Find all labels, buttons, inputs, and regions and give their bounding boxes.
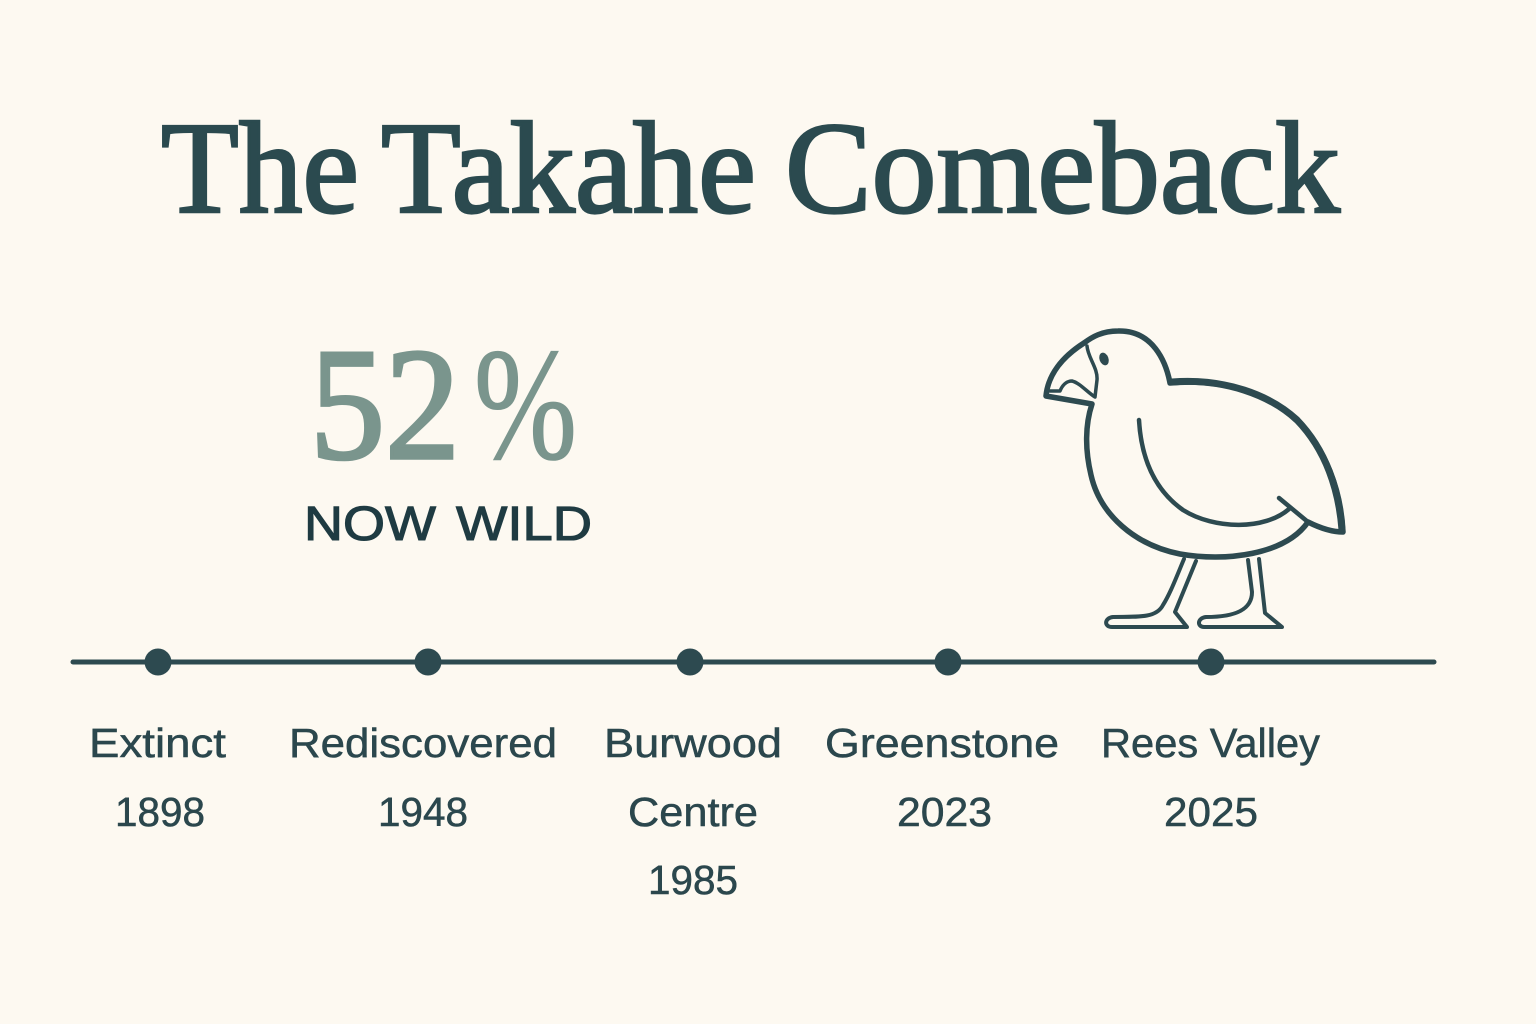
milestone: Rees Valley 2025: 2025 <box>1164 789 1258 835</box>
stat label: WILD <box>456 498 592 551</box>
milestone: Burwood Centre 1985: Centre <box>628 789 758 835</box>
milestone: Rediscovered 1948: 1948 <box>378 789 468 835</box>
milestone: Rediscovered 1948 <box>289 720 557 835</box>
stat value: % <box>474 315 577 493</box>
milestone: Rediscovered 1948: Rediscovered <box>289 720 557 766</box>
milestone: Greenstone 2023: 2023 <box>897 789 992 835</box>
milestone: Greenstone 2023: Greenstone <box>825 720 1059 766</box>
title <box>161 96 1340 241</box>
milestone: Burwood Centre 1985: Burwood <box>604 720 782 766</box>
timeline <box>73 648 1434 903</box>
stat block: 52% now wild <box>304 315 592 551</box>
milestone: Rees Valley 2025: Rees Valley <box>1101 720 1321 766</box>
stat value <box>310 315 577 493</box>
milestone: Greenstone 2023 <box>825 720 1059 835</box>
milestone: Extinct 1898 <box>89 720 227 835</box>
milestone: Extinct 1898: 1898 <box>115 789 205 835</box>
title: The <box>161 96 359 241</box>
bird eye <box>1098 351 1110 367</box>
icon: takahe bird outline <box>1046 331 1343 627</box>
milestone markers <box>144 648 1224 676</box>
milestone: Burwood Centre 1985: 1985 <box>648 857 738 903</box>
milestone: Burwood Centre 1985 <box>604 720 782 903</box>
stat label <box>304 498 592 551</box>
stat value: 52 <box>310 315 460 493</box>
title: Comeback <box>785 96 1340 241</box>
milestone: Rees Valley 2025 <box>1101 720 1321 835</box>
milestone: Extinct 1898: Extinct <box>89 720 227 766</box>
title: Takahe <box>381 96 756 241</box>
timeline axis <box>73 660 1434 664</box>
stat label: NOW <box>304 498 437 551</box>
